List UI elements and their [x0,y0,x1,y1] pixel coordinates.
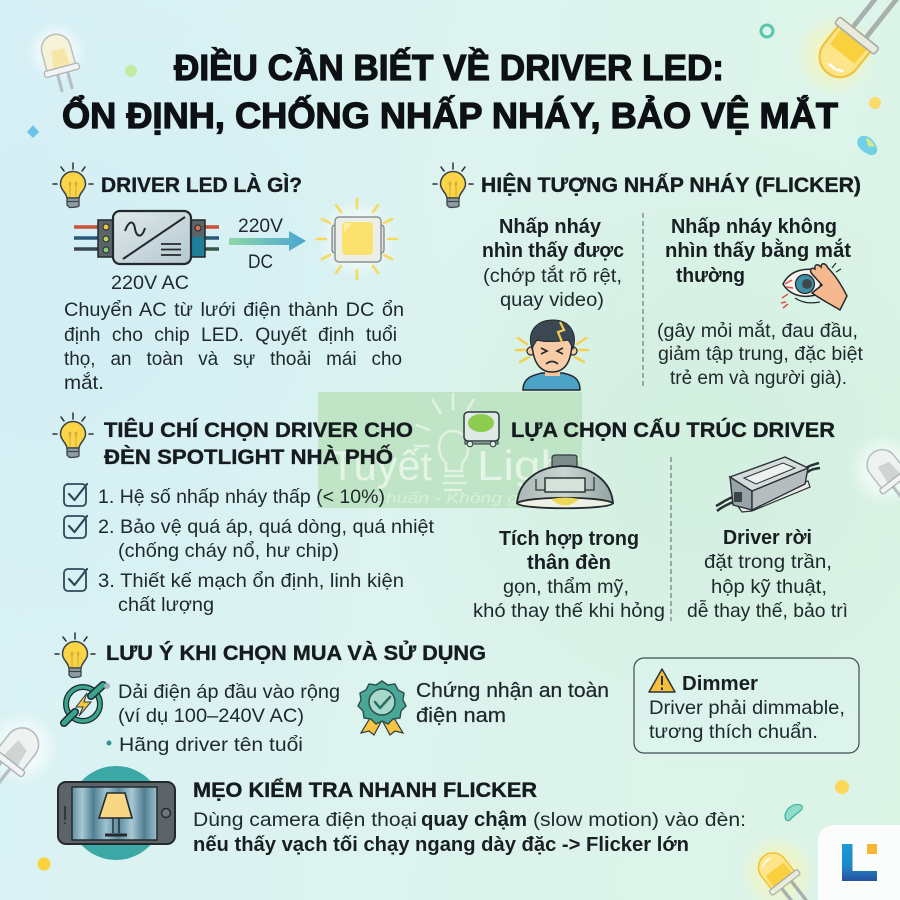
label: DC: DC [248,251,273,273]
text: invisible flicker description [657,319,864,389]
heading: driver LED là gì: DRIVER LED LÀ GÌ? [101,174,302,197]
heading: mẹo kiểm tra: MẸO KIỂM TRA NHANH FLICKER [193,779,537,802]
icon: bulb heading 3 [53,413,93,457]
icon: eye and hand [781,263,847,310]
text: integrated driver: Tích hợp trong [499,528,639,550]
text: safety certification: điện nam [416,705,506,727]
icon: integrated driver lamp [517,455,613,508]
label: 220V: 220V [238,215,283,237]
text: dimmer body [649,697,845,743]
text: criterion 3: chất lượng [118,594,214,616]
text: driver description: thọ, an toàn và sự thoải mái cho [64,348,402,370]
text: external driver: hộp kỹ thuật, [711,576,827,598]
text: invisible flicker heading [665,216,851,287]
divider [642,213,644,387]
icon: bulb heading 1 [53,163,93,207]
text: tip description: (slow motion) vào đèn: [533,809,746,831]
text: tip description: Dùng camera điện thoại [193,809,417,831]
label: 220V AC: 220V AC [111,272,189,294]
text: invisible flicker description: trẻ em và người già). [670,367,847,389]
text: invisible flicker description: giảm tập trung, đặc biệt [658,343,864,365]
text: driver description [64,299,404,394]
text: criterion 2: (chống cháy nổ, hư chip) [118,540,339,562]
icon: voltage range [64,683,110,723]
text: dimmer body: tương thích chuẩn. [649,721,818,743]
icon: LED chip [317,199,397,279]
icon: warning [649,669,675,692]
panel: lựa chọn cấu trúc driver [464,412,848,622]
text: integrated driver [473,528,665,622]
icon: checkbox 3 [64,569,87,591]
text: voltage range: Dải điện áp đầu vào rộng [118,681,340,703]
text: external driver [687,527,848,622]
heading: cấu trúc: LỰA CHỌN CẤU TRÚC DRIVER [511,418,835,442]
decoration: LED top left [27,22,87,95]
heading: lưu ý: LƯU Ý KHI CHỌN MUA VÀ SỬ DỤNG [106,641,486,665]
text: safety certification [416,680,609,727]
icon: bulb heading 4 [55,633,95,677]
text: external driver: dễ thay thế, bảo trì [687,599,848,622]
text: voltage range: (ví dụ 100–240V AC) [118,705,304,727]
watermark: Chuẩn - Không gian [372,490,544,507]
text: invisible flicker description: (gây mỏi mắt, đau đầu, [657,319,858,342]
panel: driver LED là gì [53,163,404,394]
heading: tiêu chí: TIÊU CHÍ CHỌN DRIVER CHO [104,418,413,442]
icon: phone with lamp [58,766,175,860]
panel: hiện tượng nhấp nháy [433,163,864,390]
text: criterion 3: 3. Thiết kế mạch ổn định, linh kiện [98,570,404,592]
divider [670,457,672,621]
callout: dimmer [634,658,859,753]
title: ỔN ĐỊNH, CHỐNG NHẤP NHÁY, BẢO VỆ MẮT [62,93,838,136]
text: criterion 1: 1. Hệ số nhấp nháy thấp (< 10%) [98,486,385,508]
bullet: driver brand: Hãng driver tên tuổi [119,734,303,756]
text: integrated driver: thân đèn [527,552,611,574]
text: visible flicker: nhìn thấy được [482,240,624,262]
text: tip description [193,809,746,856]
text: invisible flicker heading: Nhấp nháy không [671,216,837,238]
text: criterion 2 [98,516,435,562]
text: integrated driver: khó thay thế khi hỏng [473,600,665,622]
decoration: LED right white [849,434,900,525]
text: criterion 2: 2. Bảo vệ quá áp, quá dòng, quá nhiệt [98,516,435,538]
heading: tiêu chí: ĐÈN SPOTLIGHT NHÀ PHỐ [104,445,393,469]
text: integrated driver: gọn, thẩm mỹ, [503,576,629,598]
icon: bulb heading 2 [433,163,473,207]
text: tip description: quay chậm [421,809,527,831]
icon: driver module [74,211,219,264]
text: dimmer title: Dimmer [682,673,758,695]
panel: mẹo kiểm tra nhanh [58,766,746,860]
text: visible flicker [482,216,624,311]
watermark: Tuyết [330,442,432,489]
watermark: Light [477,442,580,489]
text: voltage range [118,681,340,727]
watermark [318,392,582,508]
icon: safety badge [358,681,406,735]
text: driver description: Chuyển AC từ lưới điện thành DC ổn [64,299,404,321]
text: external driver: đặt trong trần, [704,551,832,573]
decoration: LED left white [0,710,60,811]
icon: chip heading [464,412,499,447]
title: ĐIỀU CẦN BIẾT VỀ DRIVER LED: [174,47,724,88]
icon: external driver box [716,457,820,512]
logo [818,825,900,900]
panel: tiêu chí chọn driver [53,413,435,616]
arrow: AC to DC [229,231,306,251]
decoration: LED bottom yellow [740,834,831,900]
text: driver description: định cho chip LED. Quyết định tuổi [64,324,397,346]
heading: tiêu chí [104,418,413,469]
text: invisible flicker heading: nhìn thấy bằng mắt [665,238,851,262]
text: dimmer body: Driver phải dimmable, [649,697,845,719]
decoration: LED top right [793,0,900,97]
text: visible flicker: (chớp tắt rõ rệt, [483,264,622,287]
text: driver description: mắt. [64,371,104,394]
text: visible flicker: Nhấp nháy [499,216,602,238]
heading: flicker: HIỆN TƯỢNG NHẤP NHÁY (FLICKER) [481,173,861,197]
text: visible flicker: quay video) [500,289,604,311]
icon: checkbox 1 [64,484,87,506]
text: criterion 3 [98,570,404,616]
text: safety certification: Chứng nhận an toàn [416,680,609,702]
icon: person headache [516,320,588,390]
icon: checkbox 2 [64,516,87,538]
text: tip description: nếu thấy vạch tối chạy ngang dày đặc -> Flicker lớn [193,834,689,856]
text: external driver: Driver rời [723,527,812,549]
panel: lưu ý khi chọn mua [55,633,859,756]
text: invisible flicker heading: thường [676,265,745,287]
title [62,47,838,136]
